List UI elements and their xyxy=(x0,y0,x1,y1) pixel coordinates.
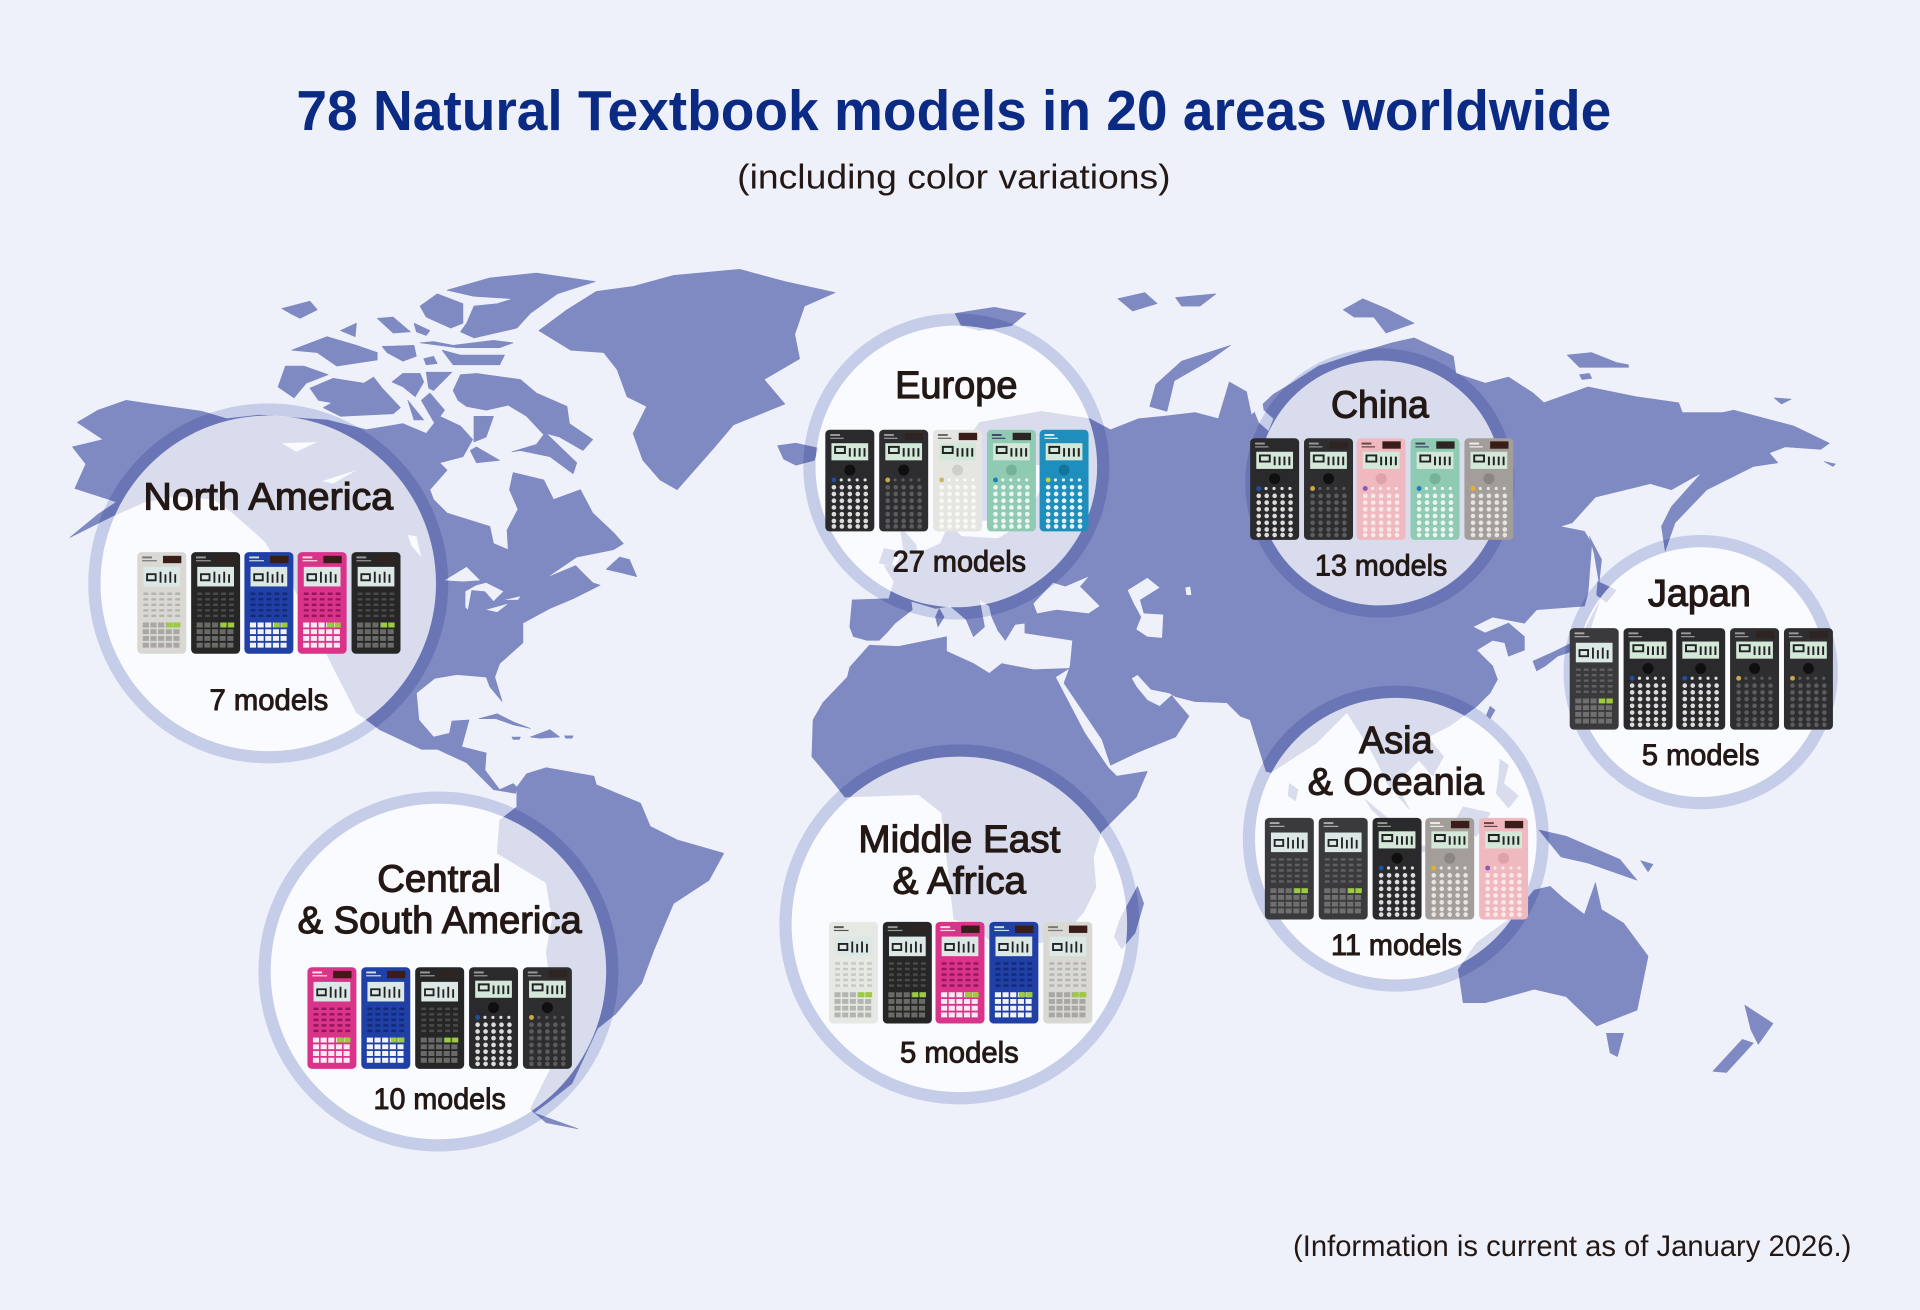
Canadian lakes xyxy=(282,424,527,557)
Black Sea xyxy=(1033,577,1100,613)
footnote: (Information is current as of January 2026.) xyxy=(1293,1230,1851,1263)
calculators: Europe xyxy=(825,430,1089,531)
heading: Middle East & Africa: & Africa xyxy=(893,861,1027,903)
Canadian arctic islands xyxy=(278,273,595,474)
subtitle: (including color variations) xyxy=(737,159,1171,197)
Iceland and Svalbard xyxy=(778,307,1026,465)
Aral Sea xyxy=(1185,586,1191,595)
count: 11 models: 11 models xyxy=(1331,929,1462,962)
Great Lakes xyxy=(445,567,520,612)
heading: Europe: Europe xyxy=(895,365,1018,407)
Eurasia xyxy=(850,338,1829,809)
Caspian Sea xyxy=(1128,578,1163,638)
Gulf of Ob xyxy=(1251,394,1273,431)
panel: Japan xyxy=(1570,541,1833,803)
Tasmania and New Zealand xyxy=(1606,1005,1773,1072)
Africa xyxy=(812,637,1147,943)
Sri Lanka, Taiwan, Philippines xyxy=(1288,706,1518,808)
count: 5 models: 5 models xyxy=(900,1037,1019,1070)
panel: Asia & Oceania xyxy=(1249,692,1543,986)
Sakhalin and Japan xyxy=(1533,536,1616,671)
South America xyxy=(497,768,724,1129)
panel: North America xyxy=(94,410,442,757)
count: 5 models: 5 models xyxy=(1642,739,1759,772)
count: 7 models: 7 models xyxy=(210,684,328,717)
calculators: Japan xyxy=(1570,628,1833,730)
Indonesia xyxy=(1365,799,1513,856)
calculators: North America xyxy=(137,552,400,654)
count: 13 models: 13 models xyxy=(1315,549,1447,582)
panel: Middle East & Africa xyxy=(786,750,1133,1098)
Greenland xyxy=(539,269,835,490)
map water cut-outs xyxy=(282,394,1273,638)
Australia xyxy=(1458,883,1648,1026)
Newfoundland xyxy=(606,557,637,577)
calculators: China xyxy=(1250,438,1513,540)
UK, Ireland, Corsica and Sardinia xyxy=(879,526,944,627)
heading: Asia & Oceania: & Oceania xyxy=(1308,762,1485,804)
heading: Japan: Japan xyxy=(1648,573,1751,615)
panel: China xyxy=(1250,354,1513,612)
count: 27 models: 27 models xyxy=(893,546,1026,579)
heading: North America: North America xyxy=(143,476,394,518)
count: 10 models: 10 models xyxy=(374,1083,506,1116)
Baltic Sea xyxy=(998,484,1031,534)
panel: Europe xyxy=(809,320,1103,613)
calculators: Central & South America xyxy=(307,967,572,1069)
North America mainland xyxy=(70,400,623,793)
calculators: Middle East & Africa xyxy=(829,922,1092,1024)
Caribbean islands xyxy=(479,714,573,739)
heading: Central & South America: Central xyxy=(377,858,501,900)
heading: Middle East & Africa xyxy=(858,819,1061,903)
heading: Asia & Oceania xyxy=(1308,720,1485,804)
Scandinavia xyxy=(949,411,1111,520)
calculators: Asia & Oceania xyxy=(1265,818,1528,919)
heading: China: China xyxy=(1331,384,1430,426)
panel: Central & South America xyxy=(265,798,612,1145)
world map xyxy=(70,269,1835,1129)
heading: Asia & Oceania: Asia xyxy=(1359,720,1433,762)
heading: Central & South America: & South America xyxy=(298,900,583,942)
title: 78 Natural Textbook models in 20 areas worldwide xyxy=(296,79,1611,142)
New Guinea xyxy=(1539,830,1653,880)
heading: Middle East & Africa: Middle East xyxy=(858,819,1061,861)
heading: Central & South America xyxy=(298,858,583,942)
Madagascar xyxy=(1114,886,1144,949)
Russian arctic islands xyxy=(1118,293,1835,466)
